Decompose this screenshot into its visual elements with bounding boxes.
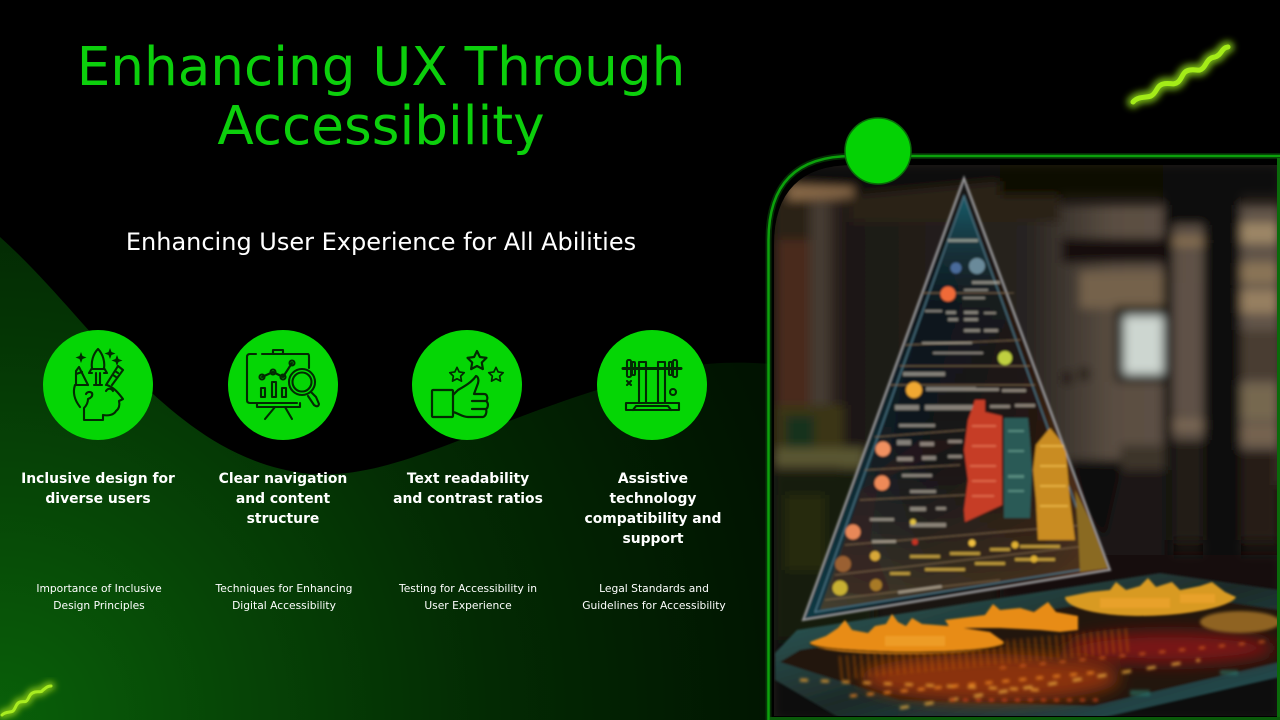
column 3 heading: Text readability xyxy=(407,471,529,487)
status dots xyxy=(950,262,962,274)
column 4 heading: technology xyxy=(610,491,696,507)
data columns xyxy=(964,400,1002,522)
photo panel: pyramid hologram over city map xyxy=(766,153,1280,720)
column 4 heading xyxy=(585,471,721,547)
column 4 description: Guidelines for Accessibility xyxy=(582,599,726,612)
map surface xyxy=(775,573,1280,720)
column 1 description: Importance of Inclusive xyxy=(36,582,162,595)
subtitle: Enhancing User Experience for All Abilities xyxy=(126,228,636,256)
column 1 description: Design Principles xyxy=(53,599,145,612)
column 3 description: User Experience xyxy=(424,599,512,612)
title: Enhancing UX Through xyxy=(77,36,685,98)
column 4 description xyxy=(582,582,726,612)
pyramid xyxy=(803,178,1110,620)
title xyxy=(77,36,685,157)
column 3 description xyxy=(398,582,537,612)
column 3 heading xyxy=(393,471,543,507)
column 1 heading xyxy=(21,471,175,507)
column 4 description: Legal Standards and xyxy=(599,582,709,595)
column 4 heading: Assistive xyxy=(618,471,688,487)
column 1 heading: Inclusive design for xyxy=(21,471,175,487)
column 4 heading: support xyxy=(622,531,684,547)
column 2 heading: and content xyxy=(236,491,330,507)
column 3 heading: and contrast ratios xyxy=(393,491,543,507)
column 2 description xyxy=(215,582,352,612)
column 2 heading: Clear navigation xyxy=(219,471,347,487)
column 2 heading: structure xyxy=(247,511,319,527)
city islands xyxy=(810,578,1236,654)
column 1 heading: diverse users xyxy=(45,491,151,507)
column 2 description: Techniques for Enhancing xyxy=(216,582,352,595)
column 1 description xyxy=(36,582,162,612)
column 4 heading: compatibility and xyxy=(585,511,721,527)
column 2 description: Digital Accessibility xyxy=(232,599,336,612)
title: Accessibility xyxy=(217,95,545,157)
green panel border xyxy=(768,156,1280,720)
column 3 description: Testing for Accessibility in xyxy=(399,582,537,595)
reflection stripes and city light speckle xyxy=(800,640,1280,708)
column 2 heading xyxy=(219,471,347,527)
